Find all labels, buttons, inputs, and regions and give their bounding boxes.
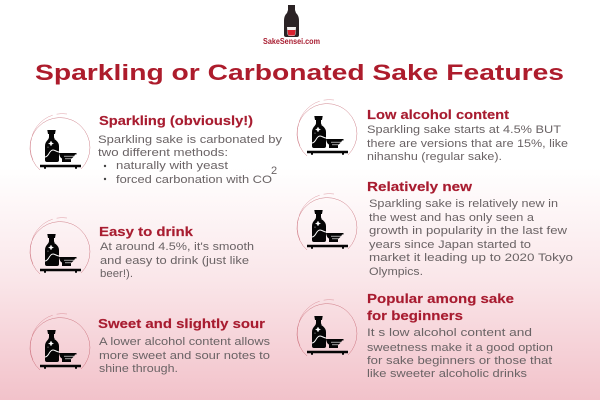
text block: low alcohol: Sparkling sake starts at 4.5% BUT bbox=[367, 124, 561, 136]
text block: popular among beginners bbox=[367, 327, 553, 380]
heading: popular among sake for beginners bbox=[367, 291, 514, 323]
icon: sake bottle and bowl bbox=[30, 218, 90, 274]
text block: easy to drink: and easy to drink (just like bbox=[100, 255, 249, 267]
panel: sweet and sour bbox=[30, 314, 271, 375]
heading: relatively new: Relatively new bbox=[367, 179, 473, 194]
logo text: SakeSensei.com bbox=[263, 36, 320, 46]
heading: popular among sake for beginners: Popular among sake bbox=[367, 291, 514, 306]
text block: low alcohol: there are versions that are 15%, like bbox=[367, 138, 568, 150]
panel: easy to drink bbox=[30, 218, 254, 280]
text block: popular among beginners: for sake beginners or those that bbox=[367, 355, 552, 367]
text block: sparkling: 2 bbox=[271, 165, 277, 177]
heading: sparkling: Sparkling (obviously!) bbox=[99, 113, 253, 128]
text block: relatively new: market it leading up to 2020 Tokyo bbox=[369, 252, 573, 264]
text block: easy to drink bbox=[100, 241, 254, 280]
logo: SakeSensei bbox=[263, 5, 320, 46]
text block: easy to drink: beer!). bbox=[100, 268, 133, 280]
text block: sparkling: forced carbonation with CO bbox=[116, 174, 273, 186]
text block: sweet and sour: A lower alcohol content allows bbox=[99, 336, 271, 348]
text block: sparkling: naturally with yeast bbox=[116, 160, 228, 172]
icon: sake bottle and bowl bbox=[297, 300, 357, 356]
text block: popular among beginners: sweetness make it a good option bbox=[367, 342, 553, 354]
text block: sweet and sour: more sweet and sour notes to bbox=[99, 350, 270, 362]
heading: sweet and slightly sour: Sweet and slightly sour bbox=[98, 316, 265, 331]
icon: sake bottle and bowl bbox=[297, 194, 357, 250]
text block: low alcohol bbox=[367, 124, 568, 163]
panel: popular among beginners bbox=[297, 291, 553, 380]
text block: sparkling bbox=[98, 134, 283, 186]
icon: sake bottle and bowl bbox=[297, 100, 357, 156]
panel: low alcohol bbox=[297, 100, 568, 163]
text block: relatively new: growth in popularity in the last few bbox=[369, 225, 567, 237]
text block: sweet and sour: shine through. bbox=[99, 363, 178, 375]
text block: low alcohol: nihanshu (regular sake). bbox=[367, 151, 502, 163]
text block: easy to drink: At around 4.5%, it's smooth bbox=[100, 241, 254, 253]
icon: sake bottle logo bbox=[284, 5, 299, 37]
panel: sparkling bbox=[30, 113, 283, 186]
icon: sake bottle and bowl bbox=[30, 114, 90, 170]
heading: easy to drink: Easy to drink bbox=[99, 224, 194, 239]
text block: popular among beginners: It s low alcohol content and bbox=[367, 327, 532, 339]
text block: popular among beginners: like sweeter alcoholic drinks bbox=[367, 368, 528, 380]
heading: popular among sake for beginners: for beginners bbox=[367, 308, 463, 323]
title: Sparkling or Carbonated Sake Features bbox=[35, 60, 564, 85]
text block: relatively new bbox=[369, 198, 573, 278]
text block: sparkling: two different methods: bbox=[98, 147, 228, 159]
icon: sake bottle and bowl bbox=[30, 314, 90, 370]
text block: relatively new: Sparkling sake is relatively new in bbox=[369, 198, 558, 210]
panel: relatively new bbox=[297, 179, 573, 278]
text block: sweet and sour bbox=[99, 336, 271, 375]
text block: relatively new: years since Japan started to bbox=[369, 239, 531, 251]
text block: sparkling: Sparkling sake is carbonated by bbox=[98, 134, 283, 146]
text block: relatively new: Olympics. bbox=[369, 266, 423, 278]
heading: low alcohol content: Low alcohol content bbox=[367, 107, 510, 122]
text block: relatively new: the west and has only seen a bbox=[369, 212, 535, 224]
